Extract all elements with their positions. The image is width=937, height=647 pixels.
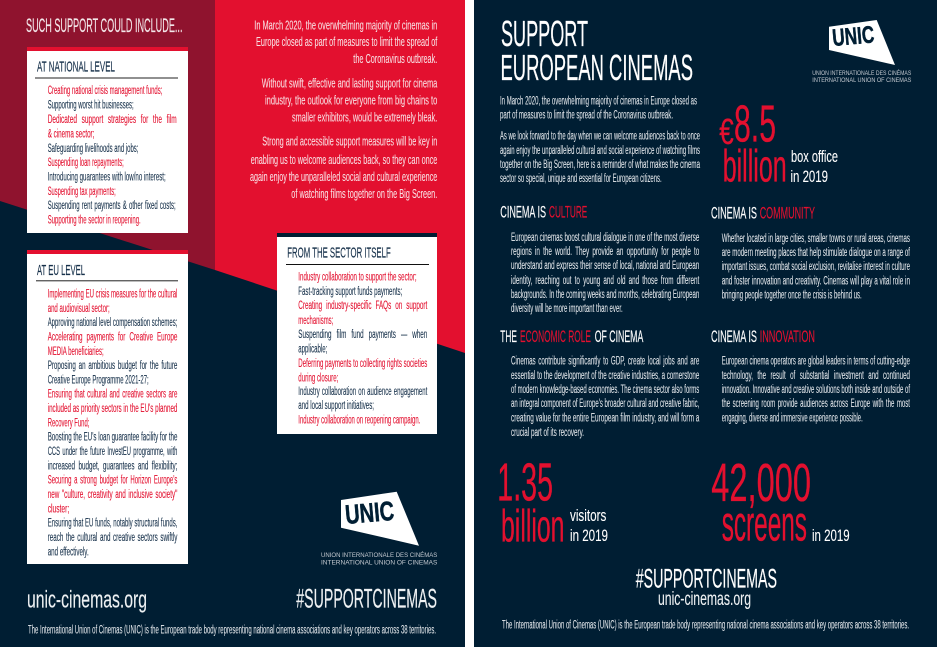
section: cinema is culture: European cinemas boost cultural dialogue in one of the most diverse bbox=[511, 232, 699, 244]
stat: 1.35 billion visitors: billion bbox=[501, 501, 564, 552]
list: sector measures: Industry collaboration on audience engagement bbox=[298, 386, 428, 398]
heading: at national level: AT NATIONAL LEVEL bbox=[37, 58, 115, 76]
section: cinema is culture: backgrounds. In the coming weeks and months, celebrating European bbox=[511, 289, 699, 301]
list: national measures: Introducing guarantees with low/no interest; bbox=[48, 172, 166, 184]
list: sector measures: mechanisms; bbox=[298, 315, 333, 327]
list: sector measures: during closure; bbox=[298, 372, 338, 384]
text block: right page introduction: part of measures to limit the spread of the Coronavirus outbreak. bbox=[500, 110, 673, 122]
text block: introduction on red: enabling us to welcome audiences back, so they can once bbox=[251, 152, 437, 167]
list: sector measures: Suspending film fund payments — when bbox=[298, 329, 427, 341]
list: EU measures bbox=[48, 288, 178, 558]
panel: from the sector itself bbox=[277, 233, 437, 434]
title: support european cinemas bbox=[500, 13, 693, 88]
section: cinema is culture: diversity will be more important than ever. bbox=[511, 303, 623, 315]
list: EU measures: included as priority sectors in the EU's planned bbox=[48, 403, 177, 415]
text block: introduction on red: of watching films together on the Big Screen. bbox=[291, 186, 437, 201]
list: EU measures: Boosting the EU's loan guarantee facility for the bbox=[48, 432, 177, 444]
stat: 1.35 billion visitors bbox=[497, 453, 608, 552]
list: EU measures: Ensuring that cultural and creative sectors are bbox=[48, 389, 177, 401]
section: the economic role of cinema: creating value for the entire European film industry, and will form a bbox=[511, 412, 700, 424]
list: EU measures: and audiovisual sector; bbox=[48, 303, 110, 315]
text block: introduction on red: industry, the outlook for everyone from big chains to bbox=[265, 92, 437, 108]
title: support european cinemas: SUPPORT bbox=[501, 13, 588, 54]
list: sector measures: Industry collaboration to support the sector; bbox=[298, 272, 417, 284]
list: EU measures: reach the cultural and creative sectors swiftly bbox=[48, 532, 178, 544]
text block: right page introduction: As we look forward to the day when we can welcome audiences back to once bbox=[500, 130, 700, 142]
list: EU measures: Ensuring that EU funds, notably structural funds, bbox=[48, 518, 177, 530]
stat: 42,000 screens: 42,000 bbox=[711, 453, 811, 513]
list: national measures: Supporting worst hit businesses; bbox=[48, 100, 134, 112]
panel: at national level bbox=[27, 47, 188, 233]
section: cinema is culture: CULTURE bbox=[549, 203, 587, 222]
panel: right page background bbox=[474, 0, 937, 647]
section: the economic role of cinema bbox=[500, 327, 700, 439]
list: EU measures: Creative Europe Programme 2021-27; bbox=[48, 374, 149, 386]
text block: introduction on red: again enjoy the unparalleled social and cultural experience bbox=[250, 169, 437, 184]
logo: UNIC right page: UNION INTERNATIONALE DES CINÉMAS bbox=[812, 70, 911, 77]
section: the economic role of cinema: an integral component of Europe's broader cultural and creative fabric, bbox=[511, 398, 699, 410]
section: the economic role of cinema: THE bbox=[500, 327, 517, 346]
stat: 42,000 screens: screens bbox=[722, 496, 807, 552]
heading: at EU level: AT EU LEVEL bbox=[37, 262, 85, 279]
section: cinema is community bbox=[711, 204, 910, 302]
list: sector measures: applicable; bbox=[298, 344, 327, 356]
logo: UNIC left page: UNION INTERNATIONALE DES CINÉMAS bbox=[321, 552, 437, 559]
hashtag: left page: #SUPPORTCINEMAS bbox=[296, 584, 437, 614]
stat: box office 8.5 billion: box office bbox=[791, 147, 838, 166]
list: sector measures: Creating industry-specific FAQs on support bbox=[298, 300, 428, 312]
logo: UNIC right page: UNIC bbox=[831, 21, 875, 52]
list: sector measures: and local support initiatives; bbox=[298, 400, 374, 412]
list: EU measures: increased budget, guarantees and flexibility; bbox=[48, 460, 177, 472]
list: EU measures: new "culture, creativity and inclusive society" bbox=[48, 489, 177, 501]
logo: UNIC left page bbox=[321, 492, 437, 567]
text block: introduction on red: smaller exhibitors, would be extremely bleak. bbox=[292, 110, 437, 124]
text block: introduction on red bbox=[250, 18, 438, 201]
list: national measures: Suspending loan repayments; bbox=[48, 157, 124, 169]
stat: 42,000 screens bbox=[711, 453, 850, 552]
list: EU measures: Implementing EU crisis measures for the cultural bbox=[48, 288, 177, 300]
list: EU measures: and effectively. bbox=[48, 546, 89, 558]
section: cinema is culture: regions in the world. They provide an opportunity for people to bbox=[511, 246, 699, 258]
list: sector measures: Industry collaboration on reopening campaign. bbox=[298, 414, 420, 426]
logo: UNIC left page: UNIC bbox=[344, 496, 395, 530]
section: cinema is community: CINEMA IS bbox=[711, 204, 757, 223]
stat: box office 8.5 billion: € bbox=[719, 111, 734, 152]
website: left page: unic-cinemas.org bbox=[27, 587, 147, 614]
list: EU measures: MEDIA beneficiaries; bbox=[48, 346, 104, 358]
list: national measures: Suspending rent payments & other fixed costs; bbox=[48, 200, 176, 212]
title: support european cinemas: EUROPEAN CINEMAS bbox=[500, 47, 693, 88]
logo: UNIC left page: INTERNATIONAL UNION OF CINEMAS bbox=[321, 561, 437, 567]
section: the economic role of cinema: crucial part of its recovery. bbox=[511, 427, 584, 439]
list: sector measures bbox=[298, 272, 428, 426]
section: cinema is culture: CINEMA IS bbox=[500, 203, 546, 222]
section: the economic role of cinema: OF CINEMA bbox=[595, 327, 644, 346]
text block: introduction on red: Strong and accessible support measures will be key in bbox=[262, 134, 437, 148]
text block: right page introduction bbox=[500, 96, 700, 185]
list: EU measures: Recovery Fund; bbox=[48, 417, 89, 429]
text block: introduction on red: the Coronavirus outbreak. bbox=[353, 51, 437, 66]
list: EU measures: Securing a strong budget for Horizon Europe's bbox=[48, 475, 178, 487]
text block: right page introduction: sector so special, unique and essential for European citizens. bbox=[500, 173, 662, 185]
section: cinema is culture bbox=[500, 203, 700, 315]
section: the economic role of cinema: ECONOMIC ROLE bbox=[520, 327, 591, 346]
list: national measures: Dedicated support strategies for the film bbox=[48, 114, 177, 126]
stat: 1.35 billion visitors: in 2019 bbox=[570, 526, 608, 545]
list: national measures: Supporting the sector in reopening. bbox=[48, 214, 141, 226]
list: national measures bbox=[48, 85, 177, 226]
section: cinema is innovation: INNOVATION bbox=[760, 327, 815, 346]
stat: 1.35 billion visitors: visitors bbox=[570, 506, 606, 525]
stat: 1.35 billion visitors: 1.35 bbox=[497, 453, 553, 513]
text block: introduction on red: Without swift, effective and lasting support for cinema bbox=[262, 76, 438, 90]
logo: UNIC right page bbox=[812, 20, 911, 84]
text block: introduction on red: Europe closed as part of measures to limit the spread of bbox=[256, 34, 438, 49]
panel: left page background bbox=[0, 0, 465, 647]
text block: right page introduction: together on the Big Screen, here is a reminder of what makes the cinema bbox=[500, 159, 700, 171]
section: cinema is innovation: CINEMA IS bbox=[711, 327, 757, 346]
list: EU measures: CCS under the future InvestEU programme, with bbox=[48, 446, 177, 458]
list: EU measures: Proposing an ambitious budget for the future bbox=[48, 360, 177, 372]
section: cinema is culture: understand and express their sense of local, national and European bbox=[511, 260, 699, 272]
list: national measures: & cinema sector; bbox=[48, 128, 94, 140]
hashtag: right page: #SUPPORTCINEMAS bbox=[636, 564, 777, 594]
list: national measures: Safeguarding livelihoods and jobs; bbox=[48, 143, 138, 155]
list: national measures: Creating national crisis management funds; bbox=[48, 85, 162, 97]
list: EU measures: cluster; bbox=[48, 503, 69, 515]
section: cinema is innovation bbox=[711, 327, 910, 424]
text block: right page introduction: again enjoy the unparalleled cultural and social experience of watching films bbox=[500, 145, 700, 157]
list: sector measures: Deferring payments to collecting rights societies bbox=[298, 358, 427, 370]
section: cinema is culture: identity, reaching out to young and old and those from different bbox=[511, 275, 700, 287]
text: SUCH SUPPORT COULD INCLUDE... bbox=[26, 16, 182, 37]
footnote: left page: The International Union of Cinemas (UNIC) is the European trade body representing national cinema associations and key operators across 38 territories. bbox=[28, 624, 436, 636]
logo: UNIC right page: INTERNATIONAL UNION OF CINEMAS bbox=[812, 78, 911, 84]
stat: box office 8.5 billion: 8.5 bbox=[734, 96, 776, 154]
list: EU measures: Accelerating payments for Creative Europe bbox=[48, 332, 177, 344]
website: right page: unic-cinemas.org bbox=[658, 589, 751, 610]
text block: right page introduction: In March 2020, the overwhelming majority of cinemas in Europe closed as bbox=[500, 96, 697, 108]
section: the economic role of cinema: of modern knowledge-based economies. The cinema sector also forms bbox=[511, 384, 699, 396]
section: the economic role of cinema: Cinemas contribute significantly to GDP, create local jobs and are bbox=[511, 356, 699, 368]
stat: box office 8.5 billion: in 2019 bbox=[790, 167, 828, 186]
panel: at EU level bbox=[27, 250, 188, 564]
heading: from the sector itself: FROM THE SECTOR ITSELF bbox=[287, 245, 391, 262]
list: sector measures: Fast-tracking support funds payments; bbox=[298, 286, 402, 298]
stat: box office 8.5 billion bbox=[719, 96, 838, 192]
list: EU measures: Approving national level compensation schemes; bbox=[48, 317, 177, 329]
stat: 42,000 screens: in 2019 bbox=[812, 526, 850, 545]
stat: box office 8.5 billion: billion bbox=[723, 141, 787, 192]
section: the economic role of cinema: essential to the development of the creative industries, a cornerstone bbox=[511, 370, 699, 382]
text block: introduction on red: In March 2020, the overwhelming majority of cinemas in bbox=[254, 18, 437, 32]
section: cinema is community: COMMUNITY bbox=[760, 204, 815, 223]
list: national measures: Suspending tax payments; bbox=[48, 186, 116, 198]
